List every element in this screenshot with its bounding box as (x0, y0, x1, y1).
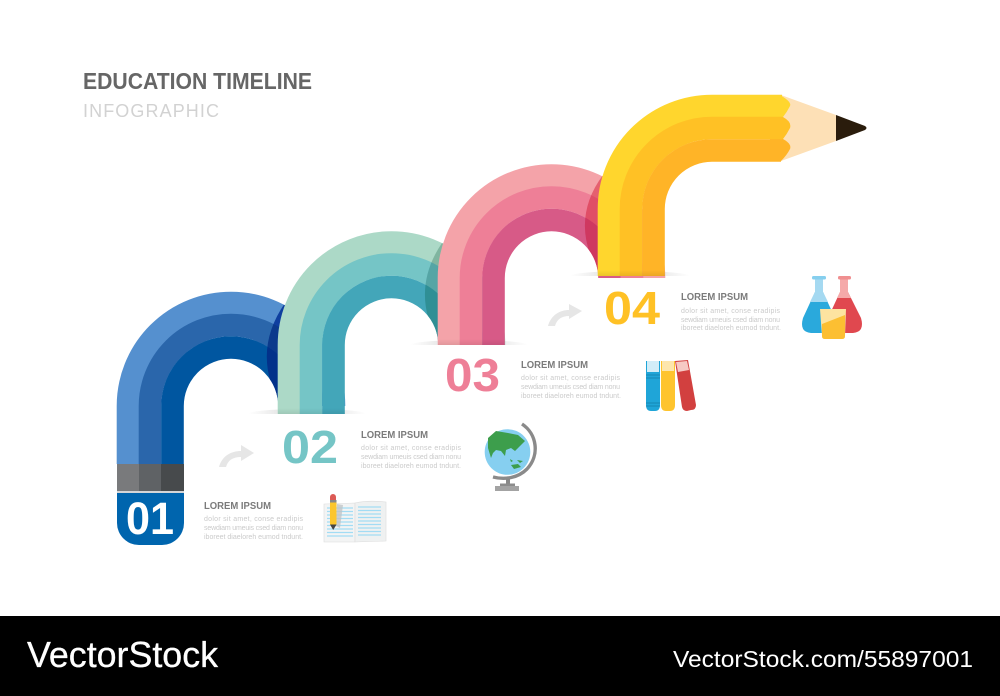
step 03 text: iboreet diaeloreh eumod tndunt. (521, 393, 621, 400)
step 04 text: dolor sit amet, conse eradipis (681, 308, 780, 315)
step 01 text: sewdiam umeuis csed diam nonu (204, 525, 303, 532)
step 02 number: 02 (282, 421, 338, 473)
arrow from step 03 to 04 (548, 304, 582, 326)
icon: flasks and beaker (802, 276, 862, 339)
arch 3 overlap shadow (584, 176, 602, 272)
title: EDUCATION TIMELINE (83, 68, 312, 94)
panel shadow step 03 (410, 340, 528, 345)
step 04 text: sewdiam umeuis csed diam nonu (681, 317, 780, 324)
step 04 text (681, 291, 781, 332)
icon: books (646, 360, 696, 411)
step 02 text: iboreet diaeloreh eumod tndunt. (361, 463, 461, 470)
step 03 text (521, 359, 621, 400)
step 01 text: LOREM IPSUM (204, 500, 271, 512)
panel shadow step 04 (570, 271, 690, 276)
step 04 text: LOREM IPSUM (681, 291, 748, 303)
step 01 text: dolor sit amet, conse eradipis (204, 516, 304, 523)
step 02 text: LOREM IPSUM (361, 429, 428, 441)
footer url: VectorStock.com/55897001 (673, 646, 973, 672)
pencil lead tip (836, 115, 866, 141)
step 01 text (204, 500, 304, 541)
pencil arch 2: teal (278, 242, 494, 414)
step 02 text: dolor sit amet, conse eradipis (361, 445, 462, 452)
panel shadow step 02 (248, 409, 366, 414)
pencil wood tip (781, 95, 836, 161)
step 02 text: sewdiam umeuis csed diam nonu (361, 454, 461, 461)
arch 1 overlap shadow (266, 304, 285, 400)
step 04 text: iboreet diaeloreh eumod tndunt. (681, 325, 781, 332)
footer logo text: VectorStock (27, 634, 219, 675)
step 01 text: iboreet diaeloreh eumod tndunt. (204, 534, 303, 541)
step 02 text (361, 429, 462, 470)
step 03 text: sewdiam umeuis csed diam nonu (521, 384, 620, 391)
footer band (0, 616, 1000, 696)
step 04 number: 04 (604, 282, 660, 334)
arrow from step 01 to 02 (219, 445, 254, 467)
step 03 text: LOREM IPSUM (521, 359, 588, 371)
pencil arch 3: pink (438, 176, 654, 345)
step 01 eraser badge: 01 (126, 493, 174, 544)
pencil arch 1: blue eraser end (128, 303, 334, 464)
subtitle: INFOGRAPHIC (83, 101, 219, 121)
step 03 text: dolor sit amet, conse eradipis (521, 375, 620, 382)
step 03 number: 03 (445, 349, 500, 401)
icon: open book and pencil (324, 494, 386, 542)
pencil arch 4: yellow (598, 95, 790, 276)
icon: globe (485, 424, 535, 491)
pencil ferrule (117, 464, 184, 493)
arch 2 overlap shadow (425, 243, 443, 340)
